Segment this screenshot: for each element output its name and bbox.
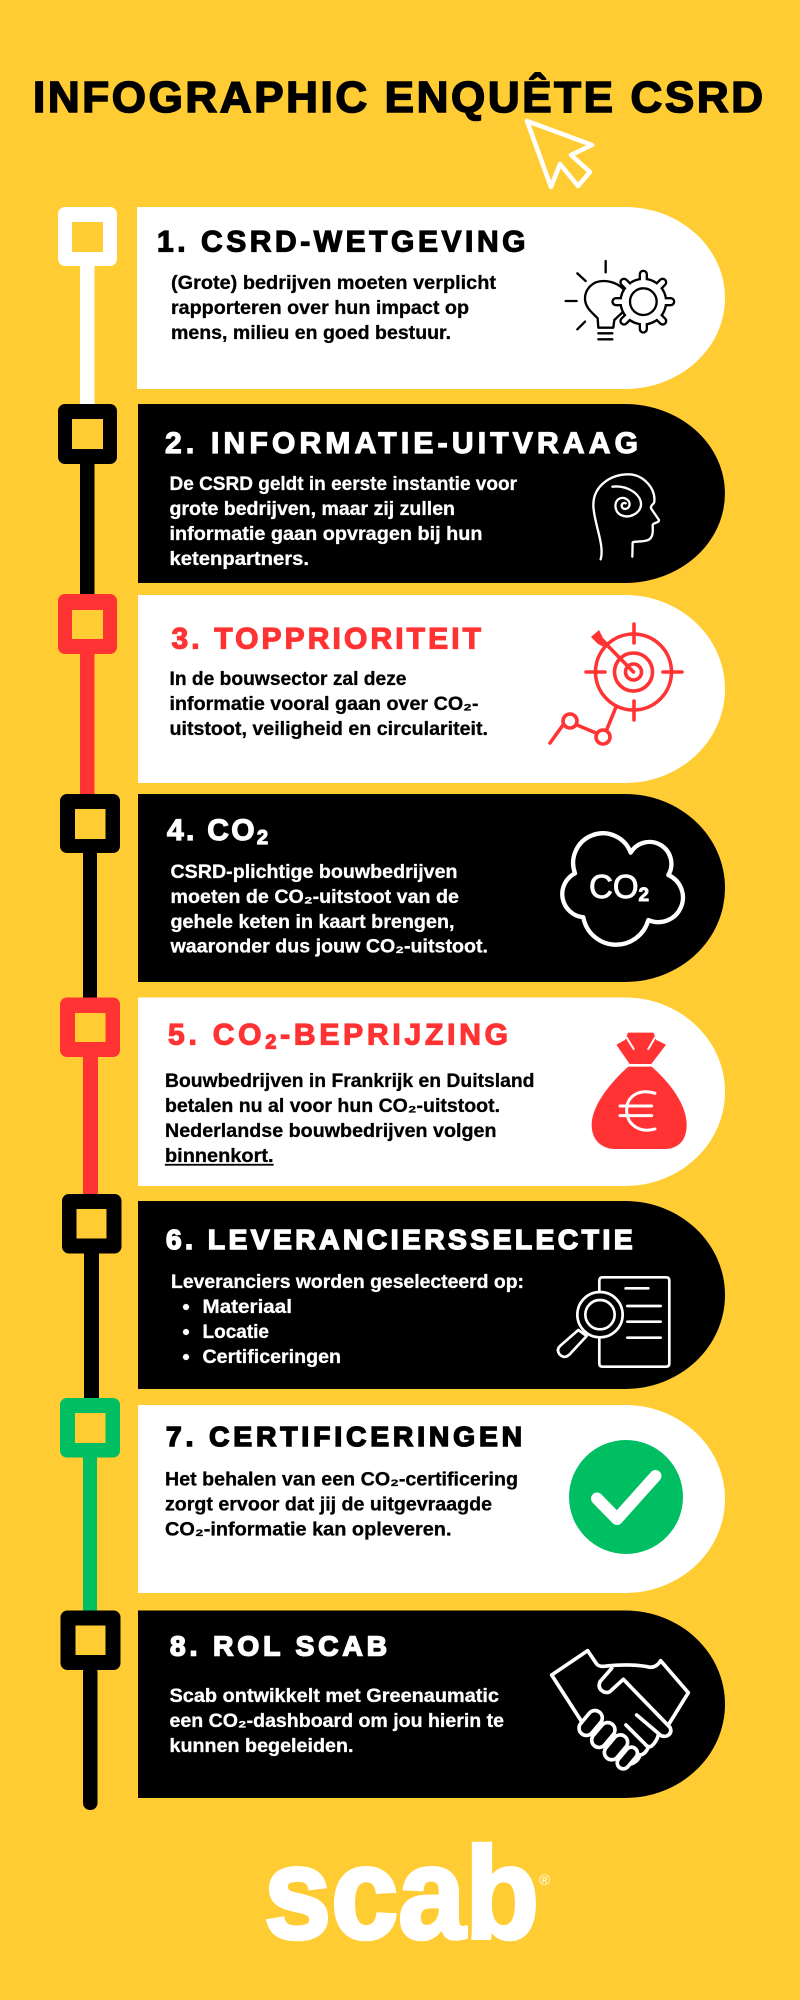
body text: Het behalen van een CO₂-certificering (165, 1468, 518, 1490)
body text: zorgt ervoor dat jij de uitgevraagde (165, 1494, 492, 1516)
body text: De CSRD geldt in eerste instantie voor (170, 473, 517, 495)
icon: magnifier and document (558, 1277, 669, 1367)
body text: uitstoot, veiligheid en circulariteit. (170, 718, 488, 740)
body text: In de bouwsector zal deze (170, 668, 407, 690)
heading: 5. CO (168, 1018, 261, 1052)
marker 3 hole (72, 610, 103, 639)
body text: informatie vooral gaan over CO₂- (170, 693, 478, 715)
body text (170, 668, 488, 740)
marker 4 (60, 794, 120, 853)
body text: CO₂-informatie kan opleveren. (165, 1518, 452, 1540)
icon: CO2 cloud (562, 833, 683, 945)
heading: 2 (265, 1032, 276, 1054)
body text: moeten de CO₂-uitstoot van de (170, 886, 459, 908)
card background (138, 1610, 725, 1798)
body text: Scab ontwikkelt met Greenaumatic (170, 1685, 499, 1707)
card background (138, 794, 725, 982)
body text: mens, milieu en goed bestuur. (171, 322, 451, 344)
marker 5 hole (75, 1013, 106, 1042)
icon: green check (569, 1440, 683, 1554)
icon: target with arrow and line chart (550, 624, 682, 744)
panel: 7 Certificeringen (138, 1405, 725, 1593)
marker 8 (60, 1610, 120, 1670)
body text: kunnen begeleiden. (170, 1735, 354, 1757)
marker 2 hole (72, 419, 103, 449)
card background (138, 404, 725, 583)
card background (138, 595, 725, 783)
heading: 3. TOPPRIORITEIT (172, 622, 481, 656)
heading: 2 (257, 827, 268, 849)
heading: 7. CERTIFICERINGEN (166, 1421, 522, 1452)
marker 1 (58, 207, 117, 266)
body text: grote bedrijven, maar zij zullen (170, 498, 455, 520)
body text: Locatie (202, 1321, 269, 1343)
body text: Nederlandse bouwbedrijven volgen (165, 1120, 496, 1142)
heading: 2. INFORMATIE-UITVRAAG (165, 427, 638, 460)
panel: 2 Informatie-uitvraag (138, 404, 725, 583)
icon: head with spiral (593, 474, 659, 559)
timeline (58, 207, 122, 1810)
heading: 8. ROL SCAB (170, 1630, 387, 1662)
marker 3 (58, 594, 117, 654)
body text: Leveranciers worden geselecteerd op: (171, 1271, 524, 1293)
body text: (Grote) bedrijven moeten verplicht (171, 272, 497, 294)
body text (170, 1685, 504, 1757)
body text: waaronder dus jouw CO₂-uitstoot. (169, 936, 488, 958)
panel: 8 Rol Scab (138, 1610, 725, 1798)
body text: Bouwbedrijven in Frankrijk en Duitsland (165, 1070, 534, 1092)
icon: CO2 cloud: 2 (638, 885, 649, 906)
icon: mouse cursor (527, 121, 592, 187)
marker 4 hole (75, 809, 106, 839)
heading: 4. CO (167, 814, 255, 847)
body text (165, 1468, 518, 1540)
body text: betalen nu al voor hun CO₂-uitstoot. (165, 1095, 500, 1117)
body text (169, 861, 488, 958)
card background (138, 1405, 725, 1593)
card background (138, 998, 725, 1186)
body text: een CO₂-dashboard om jou hierin te (170, 1710, 504, 1732)
heading: -BEPRIJZING (280, 1018, 508, 1052)
icon: money bag with euro (592, 1033, 687, 1149)
panel: 1 CSRD-wetgeving (137, 207, 725, 389)
card background (138, 1201, 725, 1389)
marker 2 (58, 404, 117, 464)
body text: ketenpartners. (170, 548, 309, 570)
marker 7 (60, 1398, 120, 1458)
card background (137, 207, 725, 389)
body text (170, 473, 517, 570)
marker 7 hole (75, 1413, 106, 1443)
icon: CO2 cloud: CO (589, 868, 638, 905)
marker 6 hole (76, 1209, 106, 1238)
body text: gehele keten in kaart brengen, (170, 911, 454, 933)
panel: 5 CO2-beprijzing (138, 998, 725, 1186)
panel: 3 Topprioriteit (138, 595, 725, 783)
logo: scab: scab (264, 1820, 539, 1966)
icon: lightbulb and gear (566, 261, 671, 339)
icon: handshake (552, 1651, 688, 1771)
title: INFOGRAPHIC ENQUÊTE CSRD (33, 72, 763, 122)
logo: scab: ® (539, 1872, 550, 1889)
body text: binnenkort. (165, 1145, 274, 1167)
body text: informatie gaan opvragen bij hun (170, 523, 482, 545)
marker 8 hole (76, 1626, 106, 1655)
panel: 6 Leveranciersselectie (138, 1201, 725, 1389)
marker 6 (62, 1194, 122, 1254)
body text: CSRD-plichtige bouwbedrijven (170, 861, 458, 883)
panel: 4 CO2 (138, 794, 725, 982)
body text: rapporteren over hun impact op (171, 297, 469, 319)
heading: 6. LEVERANCIERSSELECTIE (166, 1224, 632, 1255)
marker 1 hole (72, 222, 103, 252)
body text: Materiaal (202, 1296, 292, 1318)
body text: Certificeringen (202, 1346, 341, 1368)
body text (171, 1271, 524, 1368)
marker 5 (60, 998, 120, 1057)
body text (165, 1070, 534, 1167)
body text (171, 272, 497, 344)
heading: 1. CSRD-WETGEVING (157, 226, 526, 258)
